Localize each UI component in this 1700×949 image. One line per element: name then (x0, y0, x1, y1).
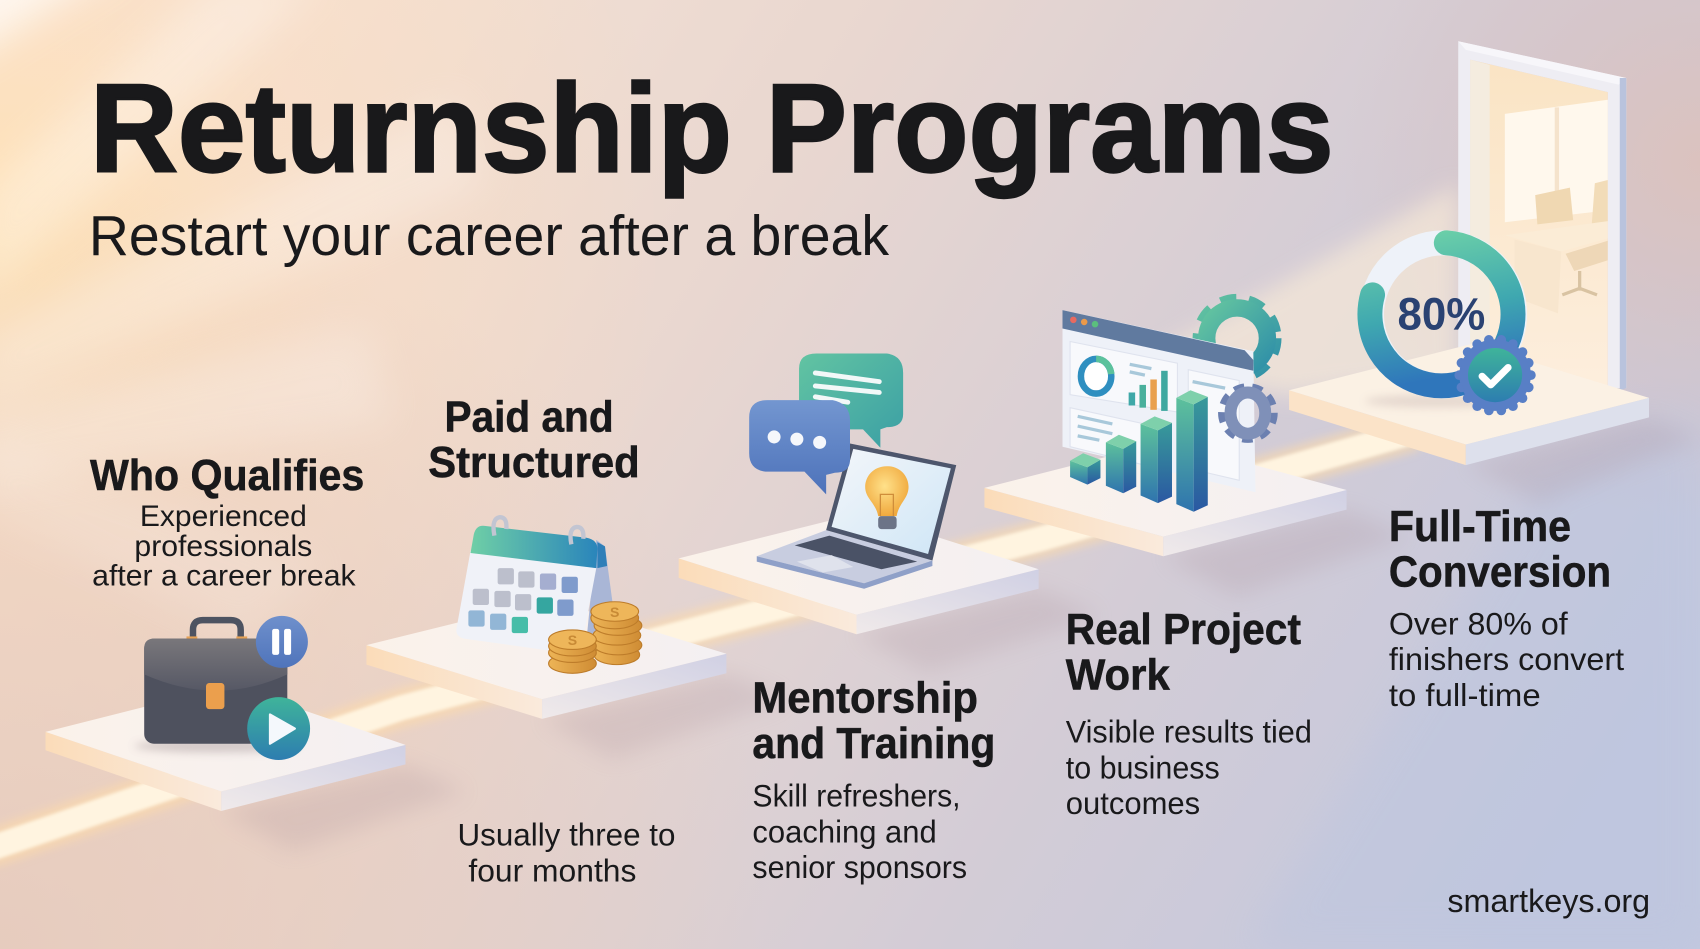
icon: blue speech bubble (749, 400, 850, 494)
text block: real project work: to business (1066, 750, 1220, 785)
dashboard panels (1070, 342, 1239, 480)
door to office (1458, 41, 1626, 390)
text block: mentorship and training: Skill refreshers, (752, 779, 961, 814)
coin symbols (568, 604, 619, 648)
source credit: smartkeys.org (1447, 883, 1650, 919)
step 1 platform (46, 685, 405, 811)
text block: full-time conversion: Over 80% of (1389, 606, 1568, 641)
text block: mentorship and training: and Training (752, 720, 995, 768)
text block: paid and structured detail: four months (468, 853, 636, 888)
text block: who qualifies (90, 452, 364, 592)
text block: who qualifies: Experienced (140, 501, 307, 533)
icon: laptop with lightbulb (757, 443, 956, 589)
glowing path connecting the steps (0, 432, 1415, 849)
mini bar chart (1129, 371, 1168, 411)
icon: lightbulb (865, 466, 909, 529)
icon: teal gear (1199, 300, 1275, 376)
text block: mentorship and training: Mentorship (752, 674, 978, 722)
text block: full-time conversion: finishers convert (1389, 642, 1624, 677)
icon: play button (247, 697, 310, 760)
text block: paid and structured heading: Structured (428, 439, 640, 487)
icon: green speech bubble (799, 353, 903, 448)
text block: real project work: Real Project (1066, 606, 1301, 654)
text block: full-time conversion: to full-time (1389, 678, 1541, 713)
icon: check badge (1459, 339, 1531, 411)
office window (1505, 100, 1608, 222)
coin symbols: S (610, 604, 619, 620)
office interior (1470, 60, 1608, 390)
text block: full-time conversion: Conversion (1389, 549, 1611, 597)
text block: real project work: outcomes (1066, 786, 1200, 821)
icon: 80 percent progress ring (1365, 243, 1531, 411)
donut chart (1081, 359, 1111, 394)
step 2 platform (366, 600, 726, 719)
icon: pause button (256, 616, 308, 668)
desk and chairs (1505, 180, 1608, 313)
text block: paid and structured heading: Paid and (445, 394, 614, 442)
text block: real project work (1066, 606, 1312, 821)
text block: mentorship and training: coaching and (752, 814, 937, 849)
calendar day cells (468, 568, 578, 633)
text block: full-time conversion: Full-Time (1389, 503, 1571, 551)
subtitle: Restart your career after a break (89, 204, 890, 267)
icon: dashboard window (1062, 310, 1255, 492)
icon: briefcase with pause and play (134, 616, 310, 760)
text block: mentorship and training (752, 674, 995, 885)
door frame (1458, 41, 1626, 388)
text block: paid and structured detail (458, 818, 675, 888)
text block: paid and structured heading (428, 394, 640, 487)
title: Returnship Programs (90, 57, 1334, 198)
step 5 platform (1289, 344, 1649, 465)
icon: grey gear (1223, 388, 1273, 438)
text block: mentorship and training: senior sponsors (752, 850, 967, 885)
text block: paid and structured detail: Usually three to (458, 818, 675, 853)
text block: who qualifies: professionals (134, 531, 312, 563)
coin stacks (549, 602, 642, 673)
platform shadows (221, 417, 1700, 851)
text block: who qualifies: Who Qualifies (90, 452, 364, 500)
text block: full-time conversion (1389, 503, 1624, 713)
icon: calendar with coins (456, 517, 642, 673)
ring value: 80% (1398, 289, 1485, 340)
step 3 platform (679, 513, 1039, 634)
text block: real project work: Work (1066, 652, 1171, 700)
text block: real project work: Visible results tied (1066, 715, 1312, 750)
text block: who qualifies: after a career break (92, 560, 356, 592)
step 4 platform (984, 441, 1347, 556)
coin symbols: S (568, 632, 577, 648)
icon: growth bars (1070, 390, 1208, 512)
